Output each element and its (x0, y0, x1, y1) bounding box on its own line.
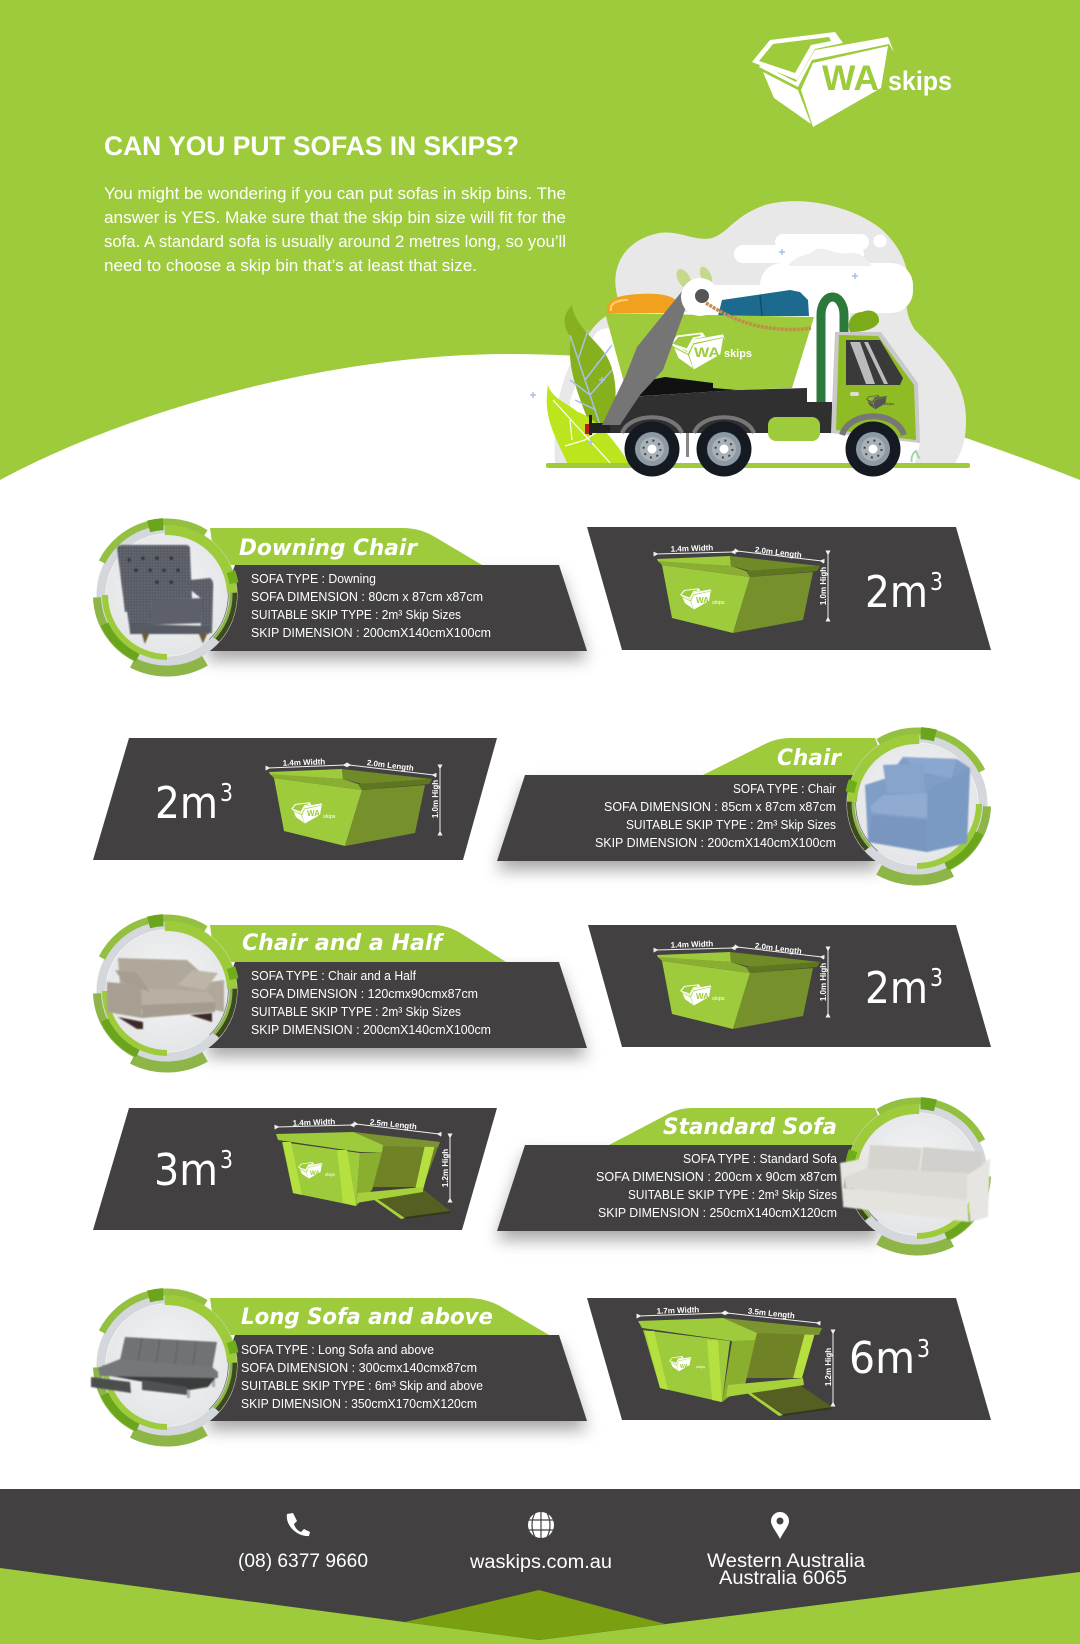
volume: 2m (155, 778, 218, 829)
spec lines: SKIP DIMENSION : 200cmX140cmX100cm (251, 625, 491, 640)
truck illustration: skips (724, 348, 752, 360)
card: Downing Chair (97, 522, 587, 671)
skip panel: 2m3 row 3: 1.4m Width (670, 939, 713, 950)
spec lines: SKIP DIMENSION : 350cmX170cmX120cm (241, 1396, 477, 1411)
skip panel: 3m3: WA (310, 1171, 320, 1177)
spec lines: SKIP DIMENSION : 250cmX140cmX120cm (598, 1205, 837, 1220)
skip drawing (276, 1132, 450, 1219)
skip panel: 3m3: 3 (220, 1145, 233, 1174)
skip panel: 2m3 row 3: skips (712, 996, 725, 1002)
truck illustration (530, 201, 970, 476)
image ring (97, 522, 234, 671)
spec lines: SOFA TYPE : Chair and a Half (251, 968, 416, 983)
fenders (622, 416, 904, 435)
skip panel: 2m3 row 2: skips (323, 814, 336, 820)
spec lines (596, 1151, 838, 1220)
intro paragraph (104, 184, 566, 275)
card: Long Sofa and above (91, 1292, 587, 1441)
dimension arrows (656, 948, 733, 950)
skip panel: 2m3 row 2 (93, 738, 497, 860)
skip panel: 2m3 row 1: 3 (930, 567, 943, 596)
skip panel: 2m3 row 3: WA (696, 992, 709, 1001)
ground line (546, 463, 970, 468)
dimension arrows (639, 1313, 723, 1316)
lift arm (602, 290, 685, 425)
image ring (850, 731, 987, 880)
skip drawing (638, 1318, 832, 1416)
armchair picture (107, 958, 224, 1029)
footer dark green diamond (405, 1590, 665, 1640)
title tab (609, 1108, 890, 1145)
skip panel: 3m3: 1.2m High (441, 1149, 450, 1187)
spec lines (595, 781, 837, 850)
skip drawing (269, 769, 432, 846)
sofa picture (840, 1145, 990, 1222)
skip panel: 2m3 row 1 (587, 527, 991, 650)
chain (706, 303, 811, 330)
skip drawing (657, 952, 820, 1029)
plants (673, 266, 695, 292)
skip drawing (657, 556, 820, 633)
skip panel: 2m3 row 1: WA (696, 596, 709, 605)
footer green chevron (0, 1568, 1080, 1644)
spec lines: SOFA DIMENSION : 85cm x 87cm x87cm (604, 799, 836, 814)
skip panel: 6m3 (587, 1298, 991, 1420)
skip panel: 2m3 row 1: skips (712, 600, 725, 606)
spec lines: SOFA TYPE : Downing (251, 571, 376, 586)
volume: 2m (865, 963, 928, 1014)
skip panel: 2m3 row 3: 2.0m Length (754, 941, 802, 956)
card: Chair (497, 731, 987, 880)
pipe (821, 297, 844, 402)
volume: 6m (849, 1333, 915, 1384)
chassis (628, 377, 737, 397)
skip panel: 6m3: 3 (917, 1334, 930, 1363)
sparkles (530, 249, 858, 445)
skip panel: 6m3: WA (680, 1364, 688, 1370)
spec lines: SUITABLE SKIP TYPE : 2m³ Skip Sizes (251, 607, 461, 622)
spec lines: SKIP DIMENSION : 200cmX140cmX100cm (251, 1022, 491, 1037)
title tab (703, 738, 890, 775)
skip panel: 6m3: 1.2m High (824, 1348, 833, 1386)
title: Long Sofa and above (241, 1305, 493, 1330)
spec lines: SKIP DIMENSION : 200cmX140cmX100cm (595, 835, 836, 850)
pivot (681, 278, 719, 316)
spec lines: SOFA DIMENSION : 120cmx90cmx87cm (251, 986, 478, 1001)
intro paragraph: sofa. A standard sofa is usually around 2 metres long, so you’ll (104, 232, 566, 251)
icon: phone (287, 1513, 310, 1536)
website: waskips.com.au (469, 1552, 612, 1573)
image ring (97, 918, 234, 1067)
spec lines: SOFA DIMENSION : 80cm x 87cm x87cm (251, 589, 483, 604)
panel (205, 1335, 587, 1421)
intro paragraph: answer is YES. Make sure that the skip bin size will fit for the (104, 208, 566, 227)
footer (0, 1489, 1080, 1644)
logo: WA skips: skips (888, 66, 952, 96)
skip panel: 2m3 row 2: 3 (220, 778, 233, 807)
address: Australia 6065 (719, 1568, 847, 1589)
skip panel: 3m3: skips (325, 1172, 336, 1177)
volume: 3m (154, 1145, 218, 1196)
wheels (624, 422, 900, 476)
spec lines: SUITABLE SKIP TYPE : 2m³ Skip Sizes (251, 1004, 461, 1019)
spec lines: SOFA DIMENSION : 200cm x 90cm x87cm (596, 1169, 837, 1184)
image ring (97, 1292, 234, 1441)
skip panel: 2m3 row 1: 1.0m High (819, 567, 828, 605)
skip panel: 2m3 row 1: 2.0m Length (754, 545, 802, 560)
title: Downing Chair (239, 536, 418, 561)
green header background (0, 0, 1080, 480)
volume: 2m (865, 567, 928, 618)
card: Standard Sofa (497, 1101, 990, 1250)
title tab (210, 528, 482, 565)
spec lines: SOFA TYPE : Chair (733, 781, 837, 796)
skip panel: 2m3 row 2: WA (307, 809, 320, 818)
title tab (210, 1298, 549, 1335)
dimension arrows (656, 552, 733, 554)
skip panel: 3m3: 1.4m Width (292, 1117, 335, 1128)
skip panel: 2m3 row 1: 1.4m Width (670, 543, 713, 554)
spec lines: SUITABLE SKIP TYPE : 2m³ Skip Sizes (626, 817, 836, 832)
icon: location pin (771, 1512, 789, 1539)
skip logo (670, 332, 725, 369)
skip panel: 3m3 (93, 1108, 497, 1230)
panel (205, 962, 587, 1048)
logo: WA skips: WA (822, 59, 879, 98)
skip panel: 2m3 row 2: 1.4m Width (282, 757, 325, 768)
skip panel: 2m3 row 3: 1.0m High (819, 963, 828, 1001)
address: Western Australia (707, 1551, 865, 1572)
spec lines: SUITABLE SKIP TYPE : 2m³ Skip Sizes (628, 1187, 837, 1202)
skip on truck (605, 313, 814, 397)
skip panel: 2m3 row 3 (588, 925, 991, 1047)
intro paragraph: You might be wondering if you can put sofas in skip bins. The (104, 184, 566, 203)
dimension arrows (268, 765, 345, 768)
title: Chair (777, 746, 842, 771)
spec lines (251, 571, 491, 640)
footer background (0, 1489, 1080, 1644)
intro paragraph: need to choose a skip bin that’s at least that size. (104, 256, 477, 275)
chair picture (865, 757, 970, 852)
phone number: (08) 6377 9660 (238, 1551, 368, 1572)
title tab (210, 925, 506, 962)
title: Standard Sofa (663, 1115, 837, 1140)
futon picture (91, 1337, 218, 1398)
chair picture (117, 545, 213, 641)
logo: WA skips (752, 32, 952, 127)
heading: CAN YOU PUT SOFAS IN SKIPS? (104, 131, 519, 161)
skip panel: 6m3: skips (696, 1364, 705, 1369)
spec lines (241, 1342, 483, 1411)
panel (205, 565, 587, 651)
spec lines (251, 968, 491, 1037)
grey backdrop blob (555, 201, 966, 463)
address (707, 1551, 865, 1589)
spec lines: SOFA TYPE : Standard Sofa (683, 1151, 838, 1166)
cab (831, 332, 920, 443)
cab door logo (866, 395, 887, 409)
skip panel: 6m3: 1.7m Width (656, 1305, 699, 1316)
skip panel: 3m3: 2.5m Length (369, 1118, 417, 1131)
skip panel: 2m3 row 3: 3 (930, 963, 943, 992)
truck illustration: skips (884, 401, 895, 406)
card: Chair and a Half (97, 918, 587, 1067)
skip panel: 6m3: 3.5m Length (747, 1307, 795, 1320)
spec lines: SOFA DIMENSION : 300cmx140cmx87cm (241, 1360, 477, 1375)
sofas in skip (607, 294, 682, 313)
spec lines: SOFA TYPE : Long Sofa and above (241, 1342, 434, 1357)
dimension arrows (277, 1125, 352, 1127)
panel (497, 1145, 880, 1231)
skip panel: 2m3 row 2: 1.0m High (431, 780, 440, 818)
clouds (570, 234, 920, 463)
truck illustration: WA (694, 344, 720, 360)
panel (497, 775, 880, 861)
icon: globe (528, 1512, 554, 1538)
spec lines: SUITABLE SKIP TYPE : 6m³ Skip and above (241, 1378, 483, 1393)
skip panel: 2m3 row 2: 2.0m Length (366, 758, 414, 773)
image ring (850, 1101, 987, 1250)
title: Chair and a Half (242, 931, 444, 956)
